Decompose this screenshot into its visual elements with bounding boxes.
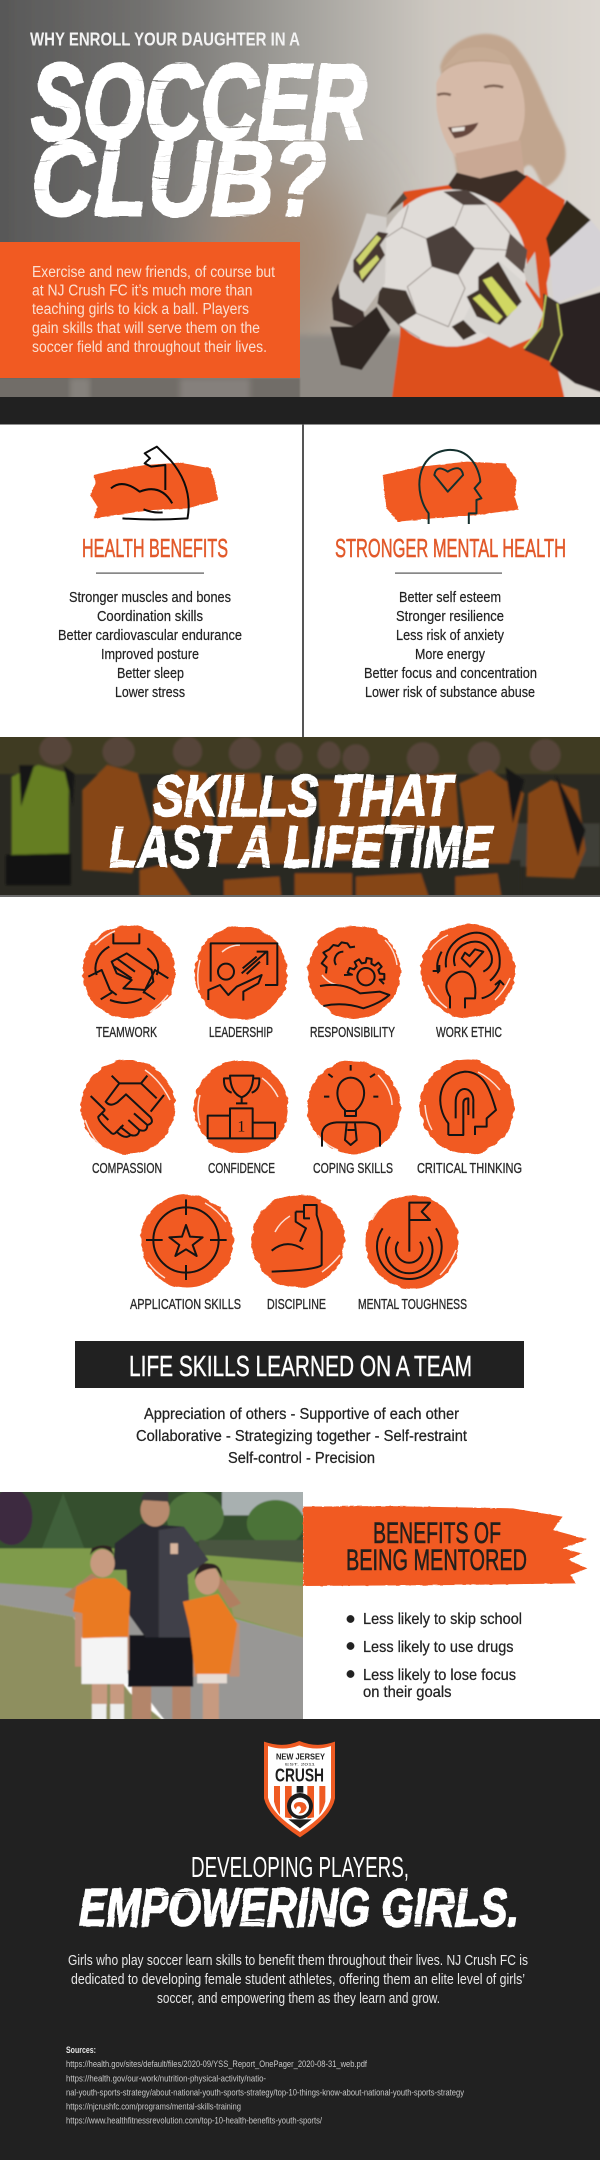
bullet list: benefits of being mentored (347, 1611, 522, 1701)
label: responsibility: RESPONSIBILITY (310, 1024, 395, 1041)
list: mental health: Less risk of anxiety (396, 628, 505, 644)
label: leadership: LEADERSHIP (209, 1024, 273, 1041)
orange intro panel (0, 242, 300, 378)
dark band under hero (0, 397, 600, 424)
orange intro panel: gain skills that will serve them on the (32, 320, 260, 337)
list: health benefits: Better sleep (117, 666, 184, 682)
icon: compassion (81, 1060, 175, 1154)
label: work ethic: WORK ETHIC (436, 1024, 502, 1041)
logo: New Jersey Crush shield: NEW JERSEY (276, 1751, 325, 1761)
icon: flexed arm on orange brush (90, 447, 218, 519)
hero title (31, 41, 367, 238)
sources: https://health.gov/sites/default/files/2020-09/YSS_Report_OnePager_2020-08-31_web.pdf (66, 2059, 367, 2070)
panel divider (302, 424, 304, 737)
orange shirts (82, 765, 586, 897)
orange brush: benefits of being mentored (303, 1506, 587, 1586)
hero title: SOCCER (31, 41, 367, 162)
icon: discipline (252, 1194, 344, 1288)
list: mental health: Stronger resilience (396, 609, 504, 625)
logo: New Jersey Crush shield: CRUSH (275, 1765, 324, 1786)
icon: confidence (194, 1060, 288, 1154)
logo: New Jersey Crush shield (264, 1741, 335, 1837)
panel: health benefits (58, 447, 242, 701)
text block: life skills (136, 1406, 468, 1467)
lime shirt player (11, 765, 69, 855)
team photo band (0, 730, 600, 897)
orange intro panel: soccer field and throughout their lives. (32, 339, 267, 356)
label: coping skills: COPING SKILLS (313, 1160, 393, 1177)
logo: New Jersey Crush shield: EST. 2011 (285, 1761, 316, 1766)
gloves (337, 213, 387, 312)
list: mental health: Better focus and concentration (364, 666, 537, 682)
list: mental health (364, 590, 537, 701)
icon: coping skills (308, 1060, 400, 1154)
bullet list: benefits of being mentored: Less likely to use drugs (363, 1639, 514, 1656)
bullet list: benefits of being mentored: Less likely to skip school (363, 1611, 522, 1628)
orange intro panel: Exercise and new friends, of course but (32, 264, 276, 281)
text block: life skills: Self-control - Precision (228, 1450, 375, 1467)
bullet list: benefits of being mentored: on their goals (363, 1684, 452, 1701)
icon: head with heart on orange brush (383, 450, 519, 524)
list: health benefits: Lower stress (115, 685, 185, 701)
panel: stronger mental health (335, 450, 566, 701)
list: mental health: Lower risk of substance abuse (365, 685, 535, 701)
podium number: 1 (237, 1119, 245, 1136)
sources (66, 2045, 464, 2126)
icon: critical thinking (420, 1060, 514, 1154)
banner: life skills learned on a team: LIFE SKILLS LEARNED ON A TEAM (129, 1351, 472, 1383)
footer paragraph: soccer, and empowering them as they learn and grow. (157, 1990, 440, 2007)
orange brush: benefits of being mentored: BENEFITS OF (373, 1517, 501, 1550)
coach (132, 1683, 151, 1725)
heading: developing players: DEVELOPING PLAYERS, (191, 1852, 409, 1884)
bullet list: benefits of being mentored: Less likely to lose focus (363, 1667, 516, 1684)
icon: leadership (194, 926, 288, 1020)
hero photo: girl holding a soccer ball (0, 0, 600, 410)
text block: life skills: Collaborative - Strategizing together - Self-restraint (136, 1428, 468, 1445)
label: application skills: APPLICATION SKILLS (130, 1296, 241, 1313)
label: compassion: COMPASSION (92, 1160, 162, 1177)
right player (195, 1565, 220, 1595)
sources: https://www.healthfitnessrevolution.com/top-10-health-benefits-youth-sports/ (66, 2116, 322, 2126)
footer background (0, 1719, 600, 2160)
list: mental health: More energy (415, 647, 486, 663)
heading: health benefits: HEALTH BENEFITS (82, 533, 228, 563)
sources: nal-youth-sports-strategy/about-national-youth-sports-strategy/top-10-things-know-about-national-youth-sports-strategy (66, 2088, 464, 2098)
icon: application skills (140, 1194, 234, 1288)
sources: https://health.gov/our-work/nutrition-physical-activity/natio- (66, 2074, 266, 2084)
heading: skills that last a lifetime: LAST A LIFETIME (109, 815, 494, 880)
icon: work ethic (421, 924, 515, 1018)
list: health benefits (58, 590, 242, 701)
label: discipline: DISCIPLINE (267, 1296, 326, 1313)
list: health benefits: Coordination skills (97, 609, 203, 625)
banner: life skills learned on a team (75, 1341, 524, 1388)
list: health benefits: Better cardiovascular endurance (58, 628, 242, 644)
list: health benefits: Improved posture (101, 647, 199, 663)
heading: skills that last a lifetime: SKILLS THAT (153, 764, 456, 829)
jersey (392, 175, 565, 400)
soccer ball (376, 189, 527, 347)
hero kicker line: WHY ENROLL YOUR DAUGHTER IN A (30, 28, 300, 50)
icon: teamwork (82, 926, 176, 1018)
list: mental health: Better self esteem (399, 590, 501, 606)
left player (90, 1549, 115, 1577)
icon: mental toughness (366, 1196, 458, 1288)
label: confidence: CONFIDENCE (208, 1160, 275, 1177)
sources: Sources: (66, 2045, 96, 2056)
heading: skills that last a lifetime (109, 764, 494, 880)
label: teamwork: TEAMWORK (96, 1024, 157, 1041)
icon: responsibility (308, 926, 400, 1018)
footer paragraph (68, 1952, 528, 2007)
label: critical thinking: CRITICAL THINKING (417, 1160, 522, 1177)
orange intro panel: teaching girls to kick a ball. Players (32, 301, 249, 318)
hero title: CLUB? (31, 120, 327, 238)
list: health benefits: Stronger muscles and bones (69, 590, 231, 606)
sources: https://njcrushfc.com/programs/mental-skills-training (66, 2102, 241, 2112)
label: mental toughness: MENTAL TOUGHNESS (358, 1296, 467, 1313)
orange intro panel: at NJ Crush FC it’s much more than (32, 282, 252, 300)
photo: coach with two players (0, 1487, 311, 1725)
text block: life skills: Appreciation of others - Supportive of each other (144, 1406, 459, 1423)
